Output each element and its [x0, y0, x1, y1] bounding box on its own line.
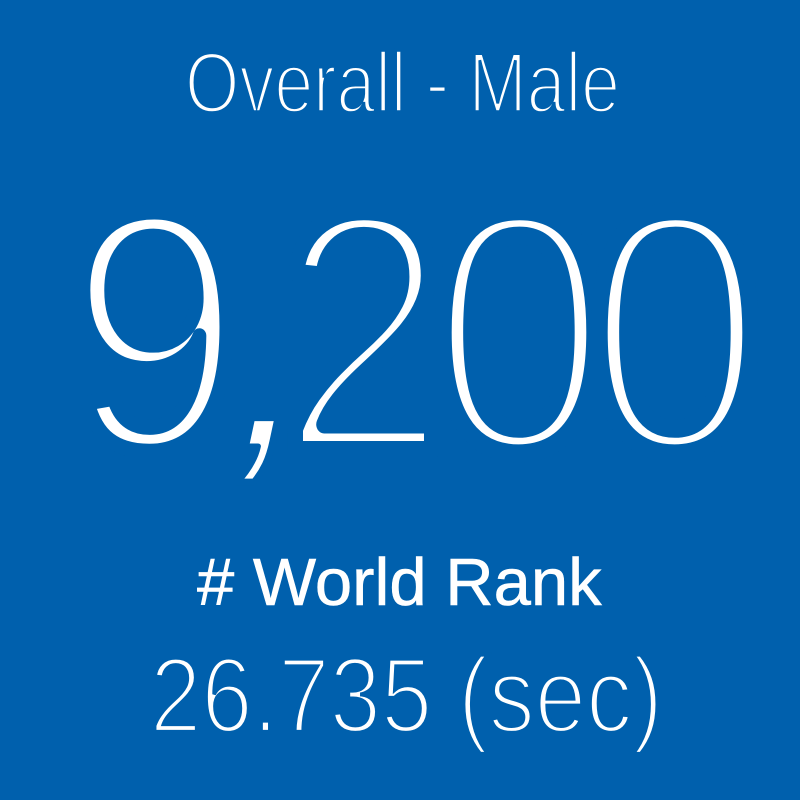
time value: 26.735 (sec): [150, 635, 663, 755]
big number: world rank: 2: [280, 141, 447, 523]
big number: world rank: [69, 141, 763, 523]
big number: world rank: 0: [431, 141, 607, 523]
big number: world rank: ,: [208, 198, 349, 505]
big number: world rank: 9: [69, 142, 241, 520]
label: world rank: # World Rank: [197, 545, 602, 620]
big number: world rank: 0: [587, 141, 763, 523]
title: Overall - Male: [185, 36, 620, 131]
